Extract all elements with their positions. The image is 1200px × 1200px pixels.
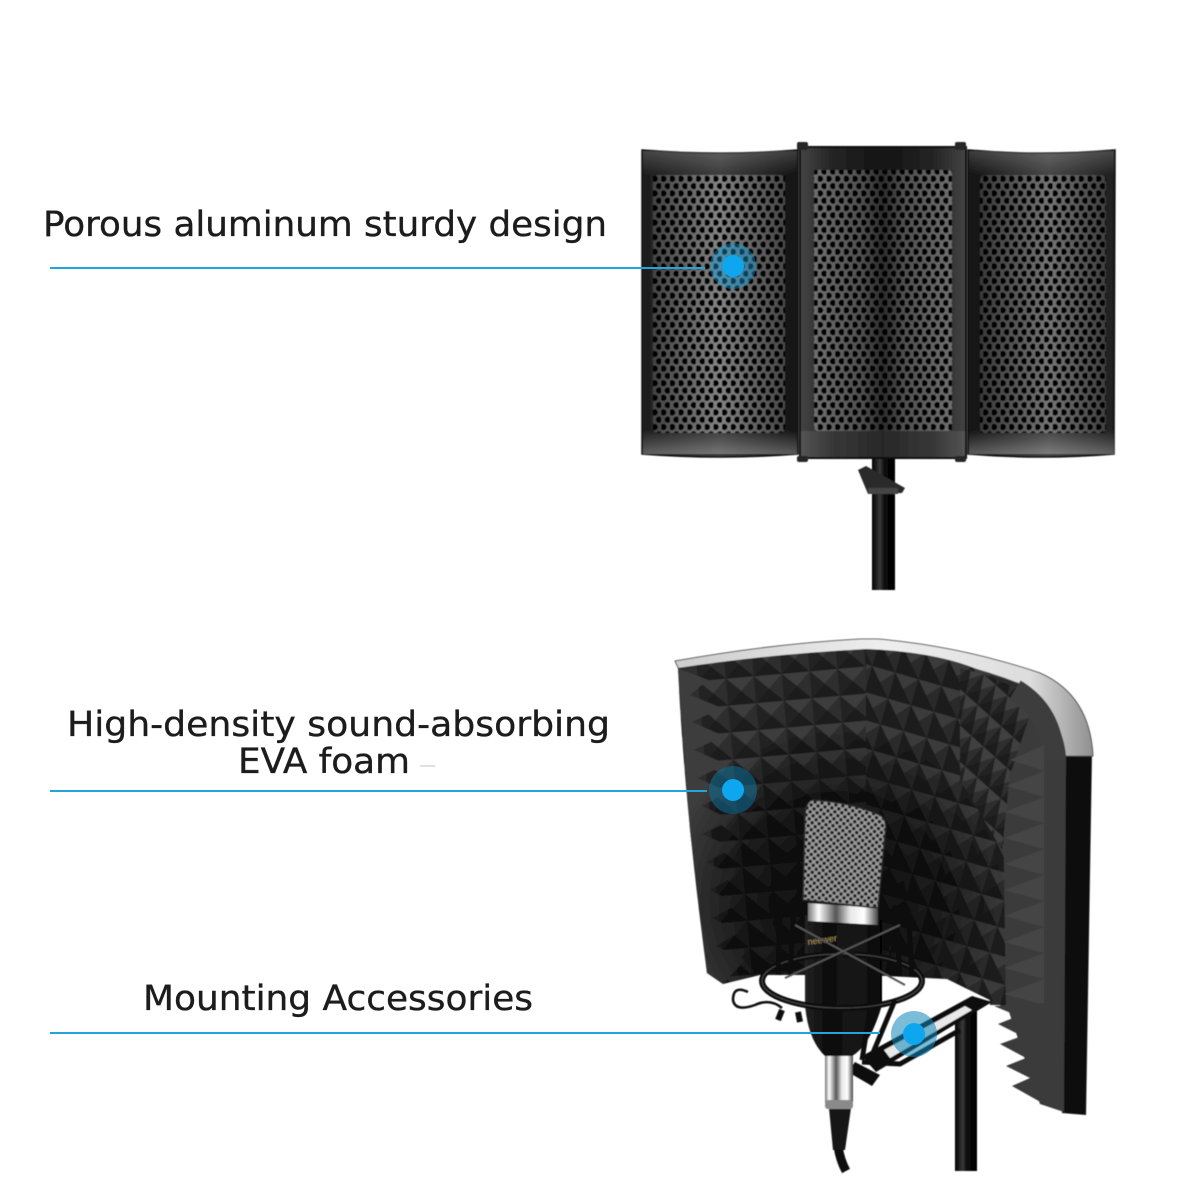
foam left edge band with teeth — [678, 668, 745, 984]
foam side edge — [1000, 680, 1066, 1112]
leader line — [50, 790, 707, 792]
microphone grille head — [803, 800, 886, 908]
foam right teeth band — [1004, 745, 1044, 1005]
foam backing — [960, 655, 1050, 1005]
callout: mounting accessories — [50, 979, 937, 1057]
silver top rim — [675, 639, 1093, 756]
stand bracket — [858, 466, 905, 494]
infographic canvas — [46, 141, 1117, 1174]
shadow behind microphone — [692, 746, 990, 990]
callout: porous aluminum — [43, 205, 756, 289]
leader line — [50, 267, 705, 269]
mount arm — [848, 996, 992, 1086]
leader line — [50, 1032, 880, 1034]
product photo: open foam shield with microphone — [670, 639, 1093, 1171]
right metal panel — [968, 150, 1115, 457]
brand label: neewer — [807, 933, 838, 947]
right outer frame — [1062, 752, 1092, 1115]
microphone cable — [838, 1146, 846, 1171]
XLR plug — [825, 1052, 853, 1150]
hinge clips — [797, 142, 966, 462]
heading — [67, 705, 610, 782]
shock mount — [733, 905, 960, 1064]
marker dot — [709, 766, 757, 814]
product photo: closed metal shield on stand — [642, 142, 1115, 590]
heading: Porous aluminum sturdy design — [43, 205, 607, 245]
callout: EVA foam — [50, 705, 757, 814]
foam inner right curve section — [960, 668, 1035, 850]
foam inner centre section — [866, 649, 1006, 1008]
left metal panel — [642, 150, 798, 457]
centre metal panel — [800, 147, 966, 458]
foam lower right jagged edge — [994, 1003, 1044, 1104]
stand pole — [872, 456, 895, 590]
faint stray mark — [420, 765, 435, 767]
stand pole — [955, 1006, 977, 1171]
heading: EVA foam — [238, 742, 410, 782]
heading: High-density sound-absorbing — [67, 705, 610, 745]
marker dot — [710, 243, 756, 289]
chrome ring — [808, 903, 878, 925]
foam inner left section — [678, 649, 867, 984]
heading: Mounting Accessories — [143, 979, 533, 1019]
marker dot — [891, 1011, 937, 1057]
microphone body — [805, 903, 882, 1056]
foam curved edge band — [1015, 690, 1054, 760]
